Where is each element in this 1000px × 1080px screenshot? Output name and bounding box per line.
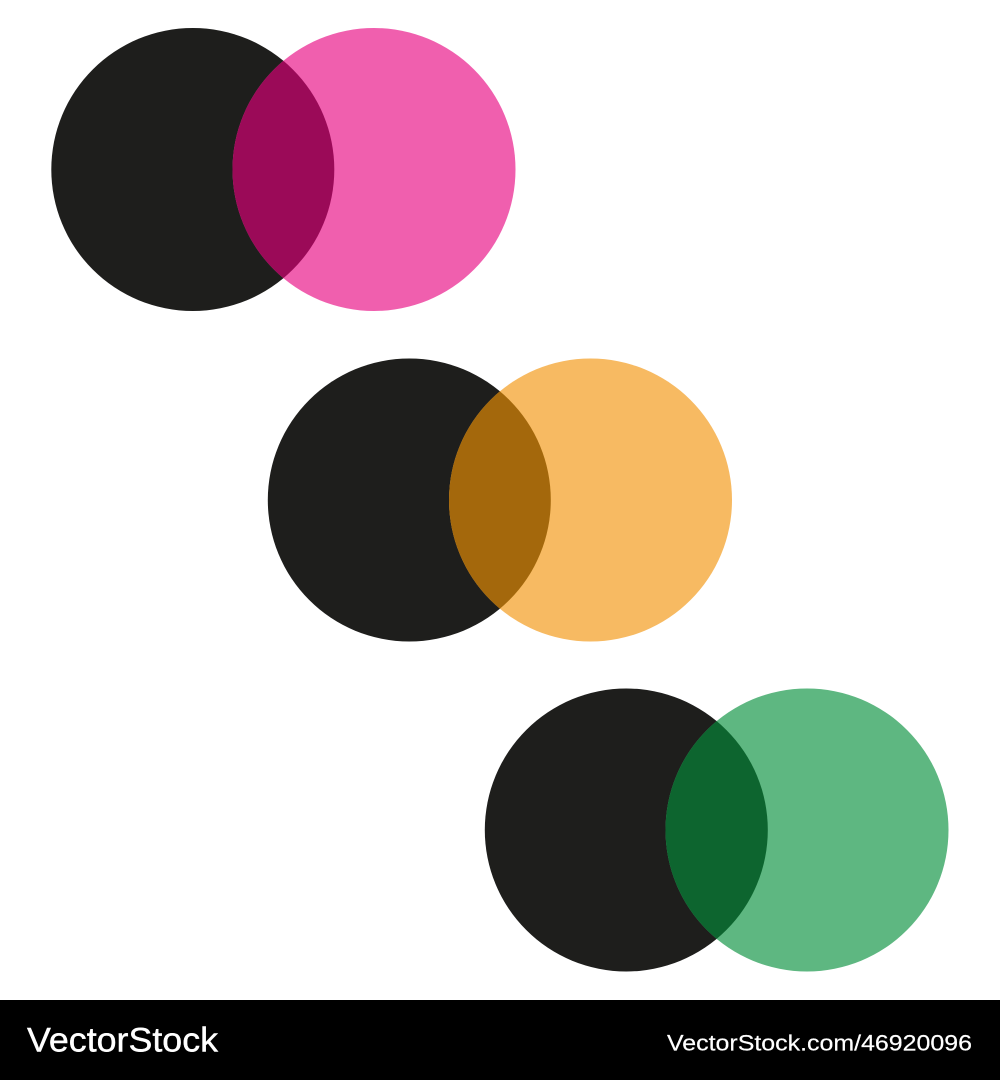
brand name: VectorStock — [27, 1022, 219, 1060]
pink overlap — [232, 60, 334, 278]
green circle — [666, 688, 948, 972]
black circle 3 — [485, 688, 768, 972]
black circle 1 — [51, 28, 334, 311]
black circle 2 — [268, 358, 551, 642]
venn pair: black and orange — [268, 358, 732, 642]
image url: VectorStock.com/46920096 — [667, 1030, 972, 1056]
venn pair: black and green — [485, 688, 948, 972]
orange overlap — [449, 391, 551, 609]
watermark footer bar — [0, 1000, 1000, 1080]
venn pair: black and pink — [51, 28, 516, 311]
pink circle — [232, 28, 516, 311]
green overlap — [666, 721, 768, 939]
orange circle — [449, 358, 732, 642]
